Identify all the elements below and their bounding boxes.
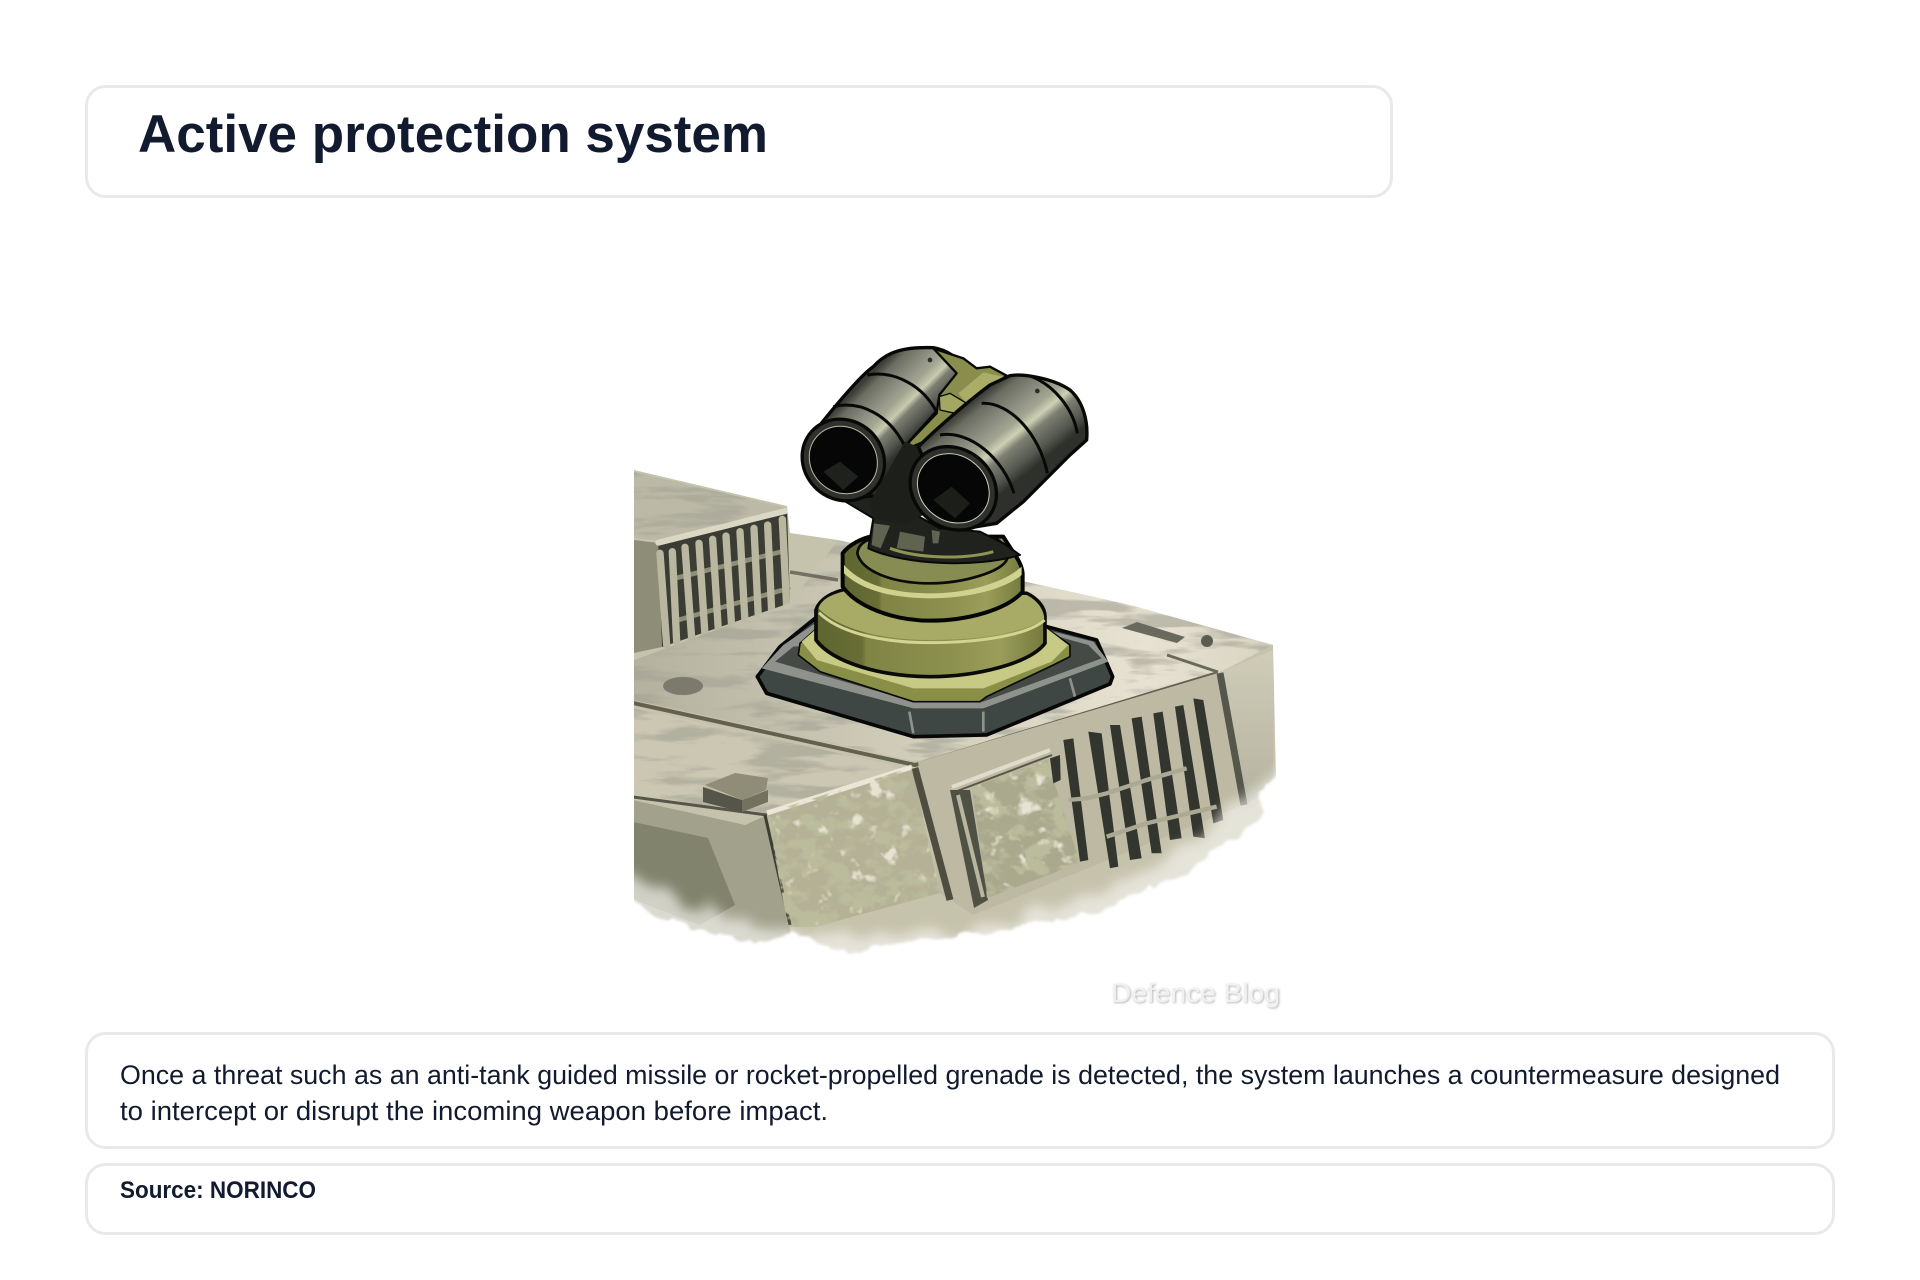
turret base and tiers [757,537,1113,737]
description text [120,1060,1780,1126]
side door [972,760,1080,898]
hull top deck [633,540,1273,762]
hull torn bottom edge [620,770,1282,985]
title: Active protection system [138,105,768,164]
tier 3 [843,537,1023,621]
illustration: turret launcher on tank hull [620,348,1290,985]
hull rear box [634,472,790,653]
source panel [86,1164,1834,1234]
description text: Once a threat such as an anti-tank guided missile or rocket-propelled grenade is detected, the system launches a countermeasure designed [120,1060,1780,1090]
hull far-left side [633,800,792,950]
olive saddle [908,348,1007,448]
neck ring [857,537,1007,583]
source text: Source: NORINCO [120,1177,316,1204]
right grille slots [1050,698,1223,868]
hatch block [703,773,768,812]
base plate [757,618,1113,737]
hull lower-left plate [633,708,915,813]
tank hull [620,465,1290,980]
left tube [805,348,960,498]
description panel [86,1034,1834,1148]
tier 1 [798,628,1070,702]
right muzzle [893,429,1013,547]
left grille bars [658,511,788,645]
tier 2 [816,588,1045,677]
pedestal [840,482,1020,563]
left muzzle [785,402,901,518]
dark yoke between tubes [870,442,930,525]
launcher [785,348,1087,563]
rivet [663,677,703,695]
right tube [918,375,1087,530]
description text: to intercept or disrupt the incoming weapon before impact. [120,1096,828,1126]
watermark: Defence Blog [1111,978,1280,1008]
hull right side [918,673,1243,915]
deck bracket [1122,622,1218,672]
hull front side with camouflage [767,767,940,927]
title panel [86,86,1392,196]
bottom fade [634,766,1276,954]
